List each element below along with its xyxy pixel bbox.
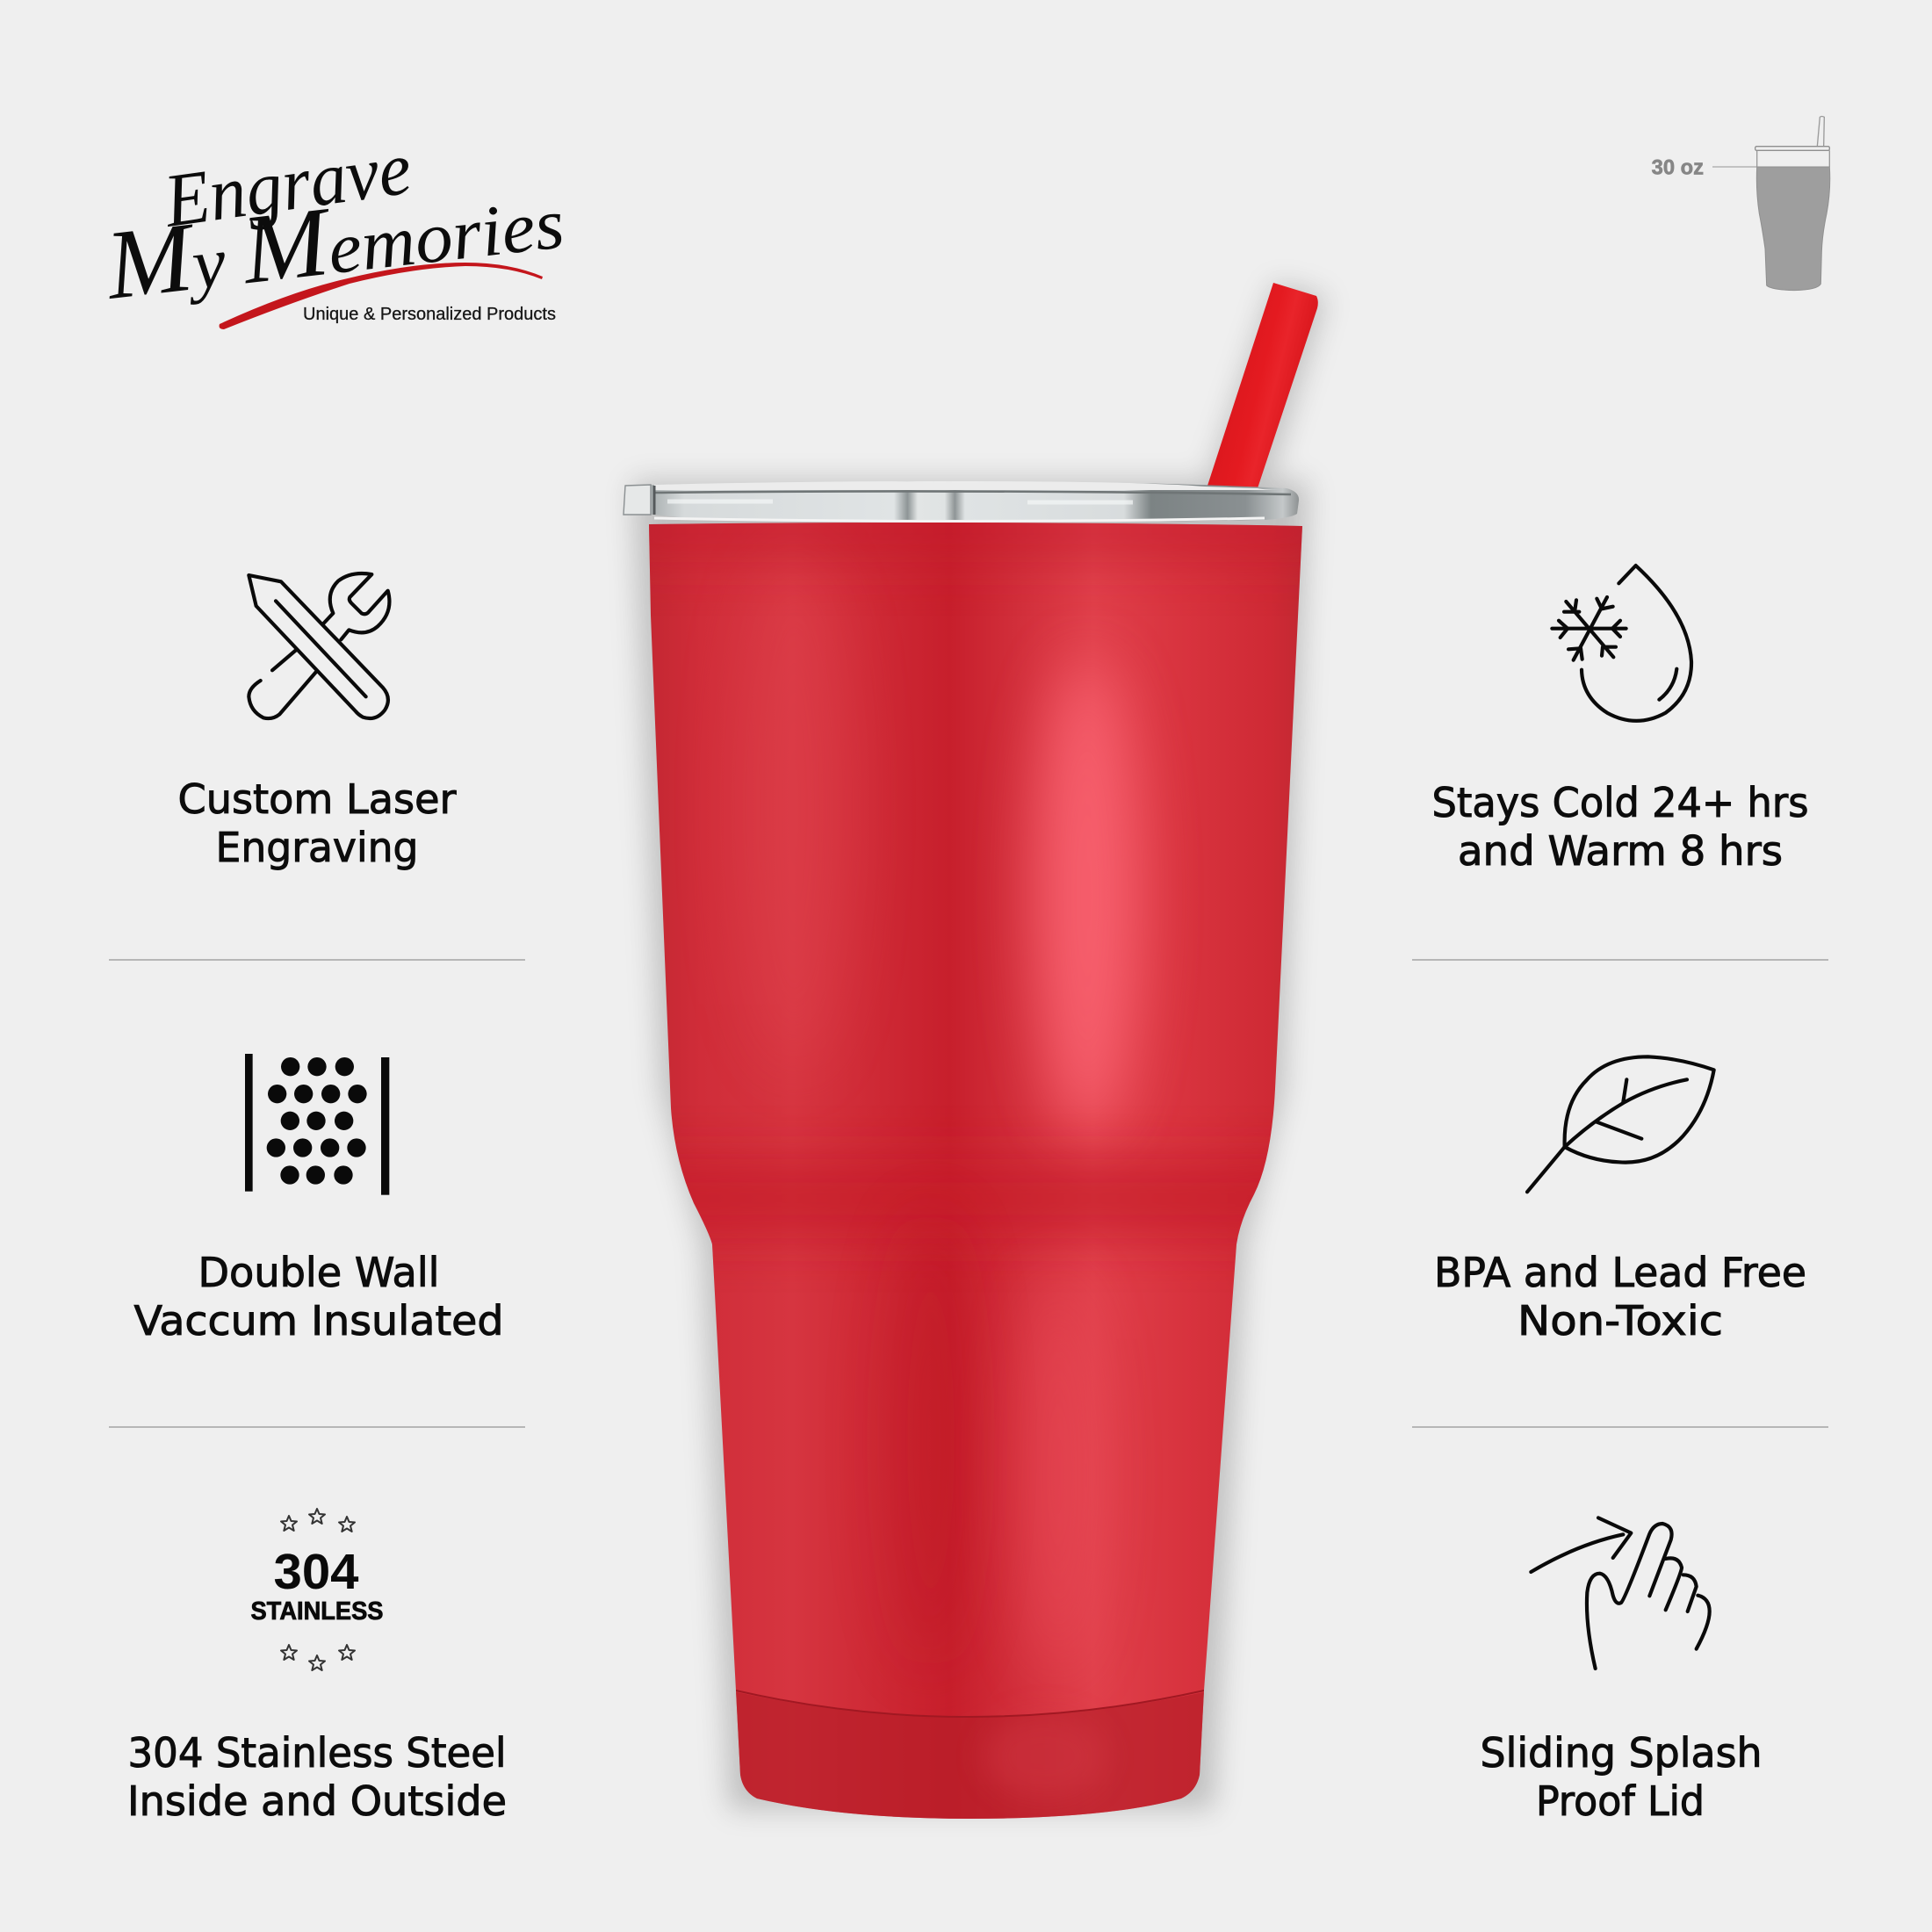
tumbler product image (615, 283, 1335, 1827)
lower highlight (1020, 1343, 1073, 1609)
feature: stays cold (right 1) (1431, 566, 1809, 875)
icon: 304 stainless badge: STAINLESS (251, 1597, 383, 1626)
feature text: Custom Laser (177, 775, 457, 823)
logo: Engrave My Memories (99, 126, 568, 329)
feature text (1434, 1249, 1806, 1344)
straw (1207, 283, 1318, 491)
size label: 30 oz (1652, 155, 1704, 179)
feature text: Double Wall (198, 1249, 439, 1296)
upper highlight (1036, 659, 1138, 1133)
feature text: BPA and Lead Free (1434, 1249, 1806, 1296)
feature text: 304 Stainless Steel (128, 1729, 506, 1777)
logo wordmark: My Memories: My Memories (99, 161, 568, 321)
feature text: Proof Lid (1536, 1777, 1705, 1825)
logo red swoosh (220, 263, 543, 329)
feature: BPA free (right 2) (1434, 1056, 1806, 1344)
feature text (133, 1249, 504, 1344)
feature text (127, 1729, 507, 1825)
bottom band (729, 1690, 1212, 1827)
icon: tools (249, 573, 389, 718)
feature text: Sliding Splash (1481, 1729, 1762, 1777)
logo wordmark: Engrave: Engrave (157, 126, 416, 243)
feature text: Engraving (216, 824, 418, 871)
top rim shading (649, 523, 1302, 568)
feature text (1481, 1729, 1762, 1825)
icon: snowflake water drop (1552, 566, 1691, 721)
stars (281, 1509, 355, 1670)
feature text (1431, 779, 1809, 875)
tumbler body (649, 523, 1302, 1819)
icon: 304 stainless badge: 304 (274, 1544, 359, 1600)
feature text: Inside and Outside (127, 1777, 507, 1825)
feature text (177, 775, 457, 871)
logo tagline: Unique & Personalized Products (303, 305, 556, 324)
clear sliding lid (624, 481, 1299, 522)
feature text: Non-Toxic (1517, 1297, 1723, 1344)
feature text: and Warm 8 hrs (1458, 827, 1783, 875)
icon: leaf (1527, 1056, 1714, 1192)
icon: hand swipe (1531, 1517, 1710, 1669)
feature: sliding lid (right 3) (1481, 1517, 1762, 1825)
feature: custom laser engraving (left 1) (177, 573, 457, 871)
feature text: Vaccum Insulated (133, 1297, 504, 1344)
mini tumbler silhouette (1755, 116, 1830, 291)
shoulder shading (615, 1159, 1335, 1238)
feature: 304 stainless (left 3) (127, 1509, 507, 1825)
icon: insulation dots between walls (245, 1054, 389, 1195)
feature: double wall (left 2) (133, 1054, 504, 1344)
icon: 304 stainless badge (251, 1509, 383, 1670)
size indicator: 30 oz (1652, 116, 1830, 291)
feature text: Stays Cold 24+ hrs (1431, 779, 1809, 826)
tumbler soft shadow (632, 283, 1326, 1809)
